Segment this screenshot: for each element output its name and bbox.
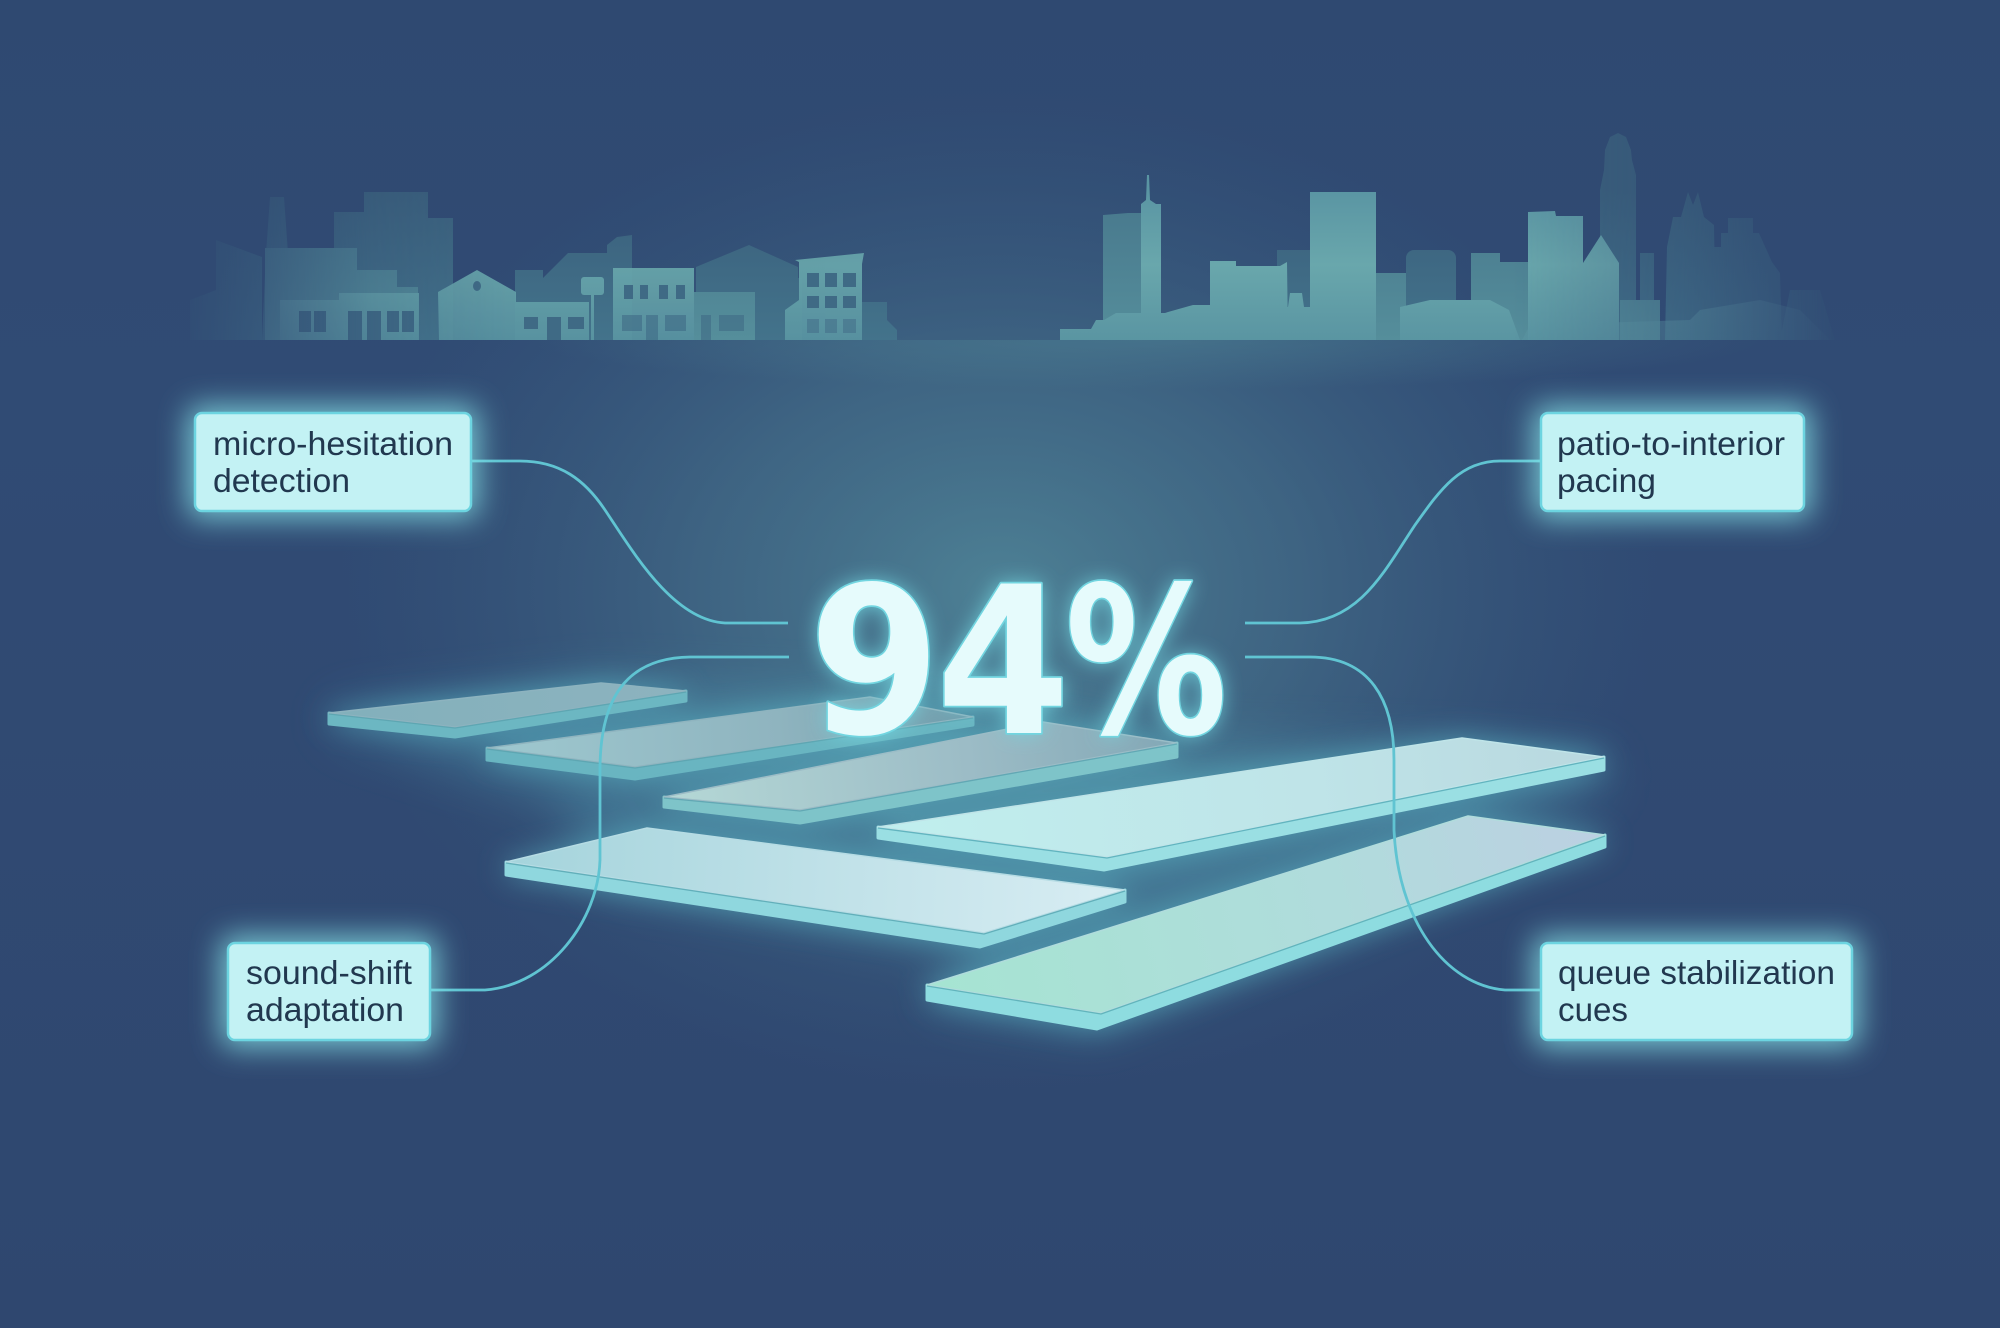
connector: sound-shift <box>431 657 789 990</box>
number glow: 9 <box>809 544 940 782</box>
number face: % <box>1065 543 1227 782</box>
card: micro-hesitation detection <box>188 406 478 518</box>
number face: 9 <box>809 544 940 782</box>
platform 6 <box>927 816 1605 1029</box>
stepped glass platforms <box>329 683 1605 1029</box>
number face <box>809 542 1227 782</box>
number glow <box>809 542 1227 782</box>
connector: patio-to-interior <box>1245 461 1540 623</box>
connector lines <box>431 461 1540 990</box>
platform glow <box>329 683 1605 1029</box>
platform 1 <box>329 683 686 737</box>
platform 3 <box>664 722 1177 823</box>
number glow: 4 <box>936 542 1070 781</box>
card: sound-shift adaptation: adaptation <box>246 991 404 1028</box>
card: patio-to-interior pacing: patio-to-interior <box>1557 425 1785 462</box>
card: micro-hesitation detection: micro-hesitation <box>213 425 453 462</box>
big number 94% <box>809 542 1227 782</box>
connector: queue stabilization <box>1245 657 1540 990</box>
connector: micro-hesitation <box>472 461 788 623</box>
card: sound-shift adaptation: sound-shift <box>246 954 412 991</box>
platform 2 <box>487 697 973 779</box>
card: queue stabilization cues: cues <box>1558 991 1628 1028</box>
left neighbourhood skyline <box>190 192 897 340</box>
card: queue stabilization cues: queue stabilization <box>1558 954 1835 991</box>
card: micro-hesitation detection: detection <box>213 462 350 499</box>
right city skyline <box>1060 133 1835 340</box>
number glow: % <box>1065 543 1227 782</box>
card: queue stabilization cues <box>1534 936 1859 1047</box>
platform 5 <box>506 828 1125 947</box>
card: patio-to-interior pacing <box>1534 406 1811 518</box>
card: sound-shift adaptation <box>221 936 437 1047</box>
platform 4 <box>878 738 1604 870</box>
card: patio-to-interior pacing: pacing <box>1557 462 1656 499</box>
wide platform haze <box>329 683 1604 1029</box>
number face: 4 <box>936 542 1070 781</box>
skyline <box>190 133 1835 340</box>
